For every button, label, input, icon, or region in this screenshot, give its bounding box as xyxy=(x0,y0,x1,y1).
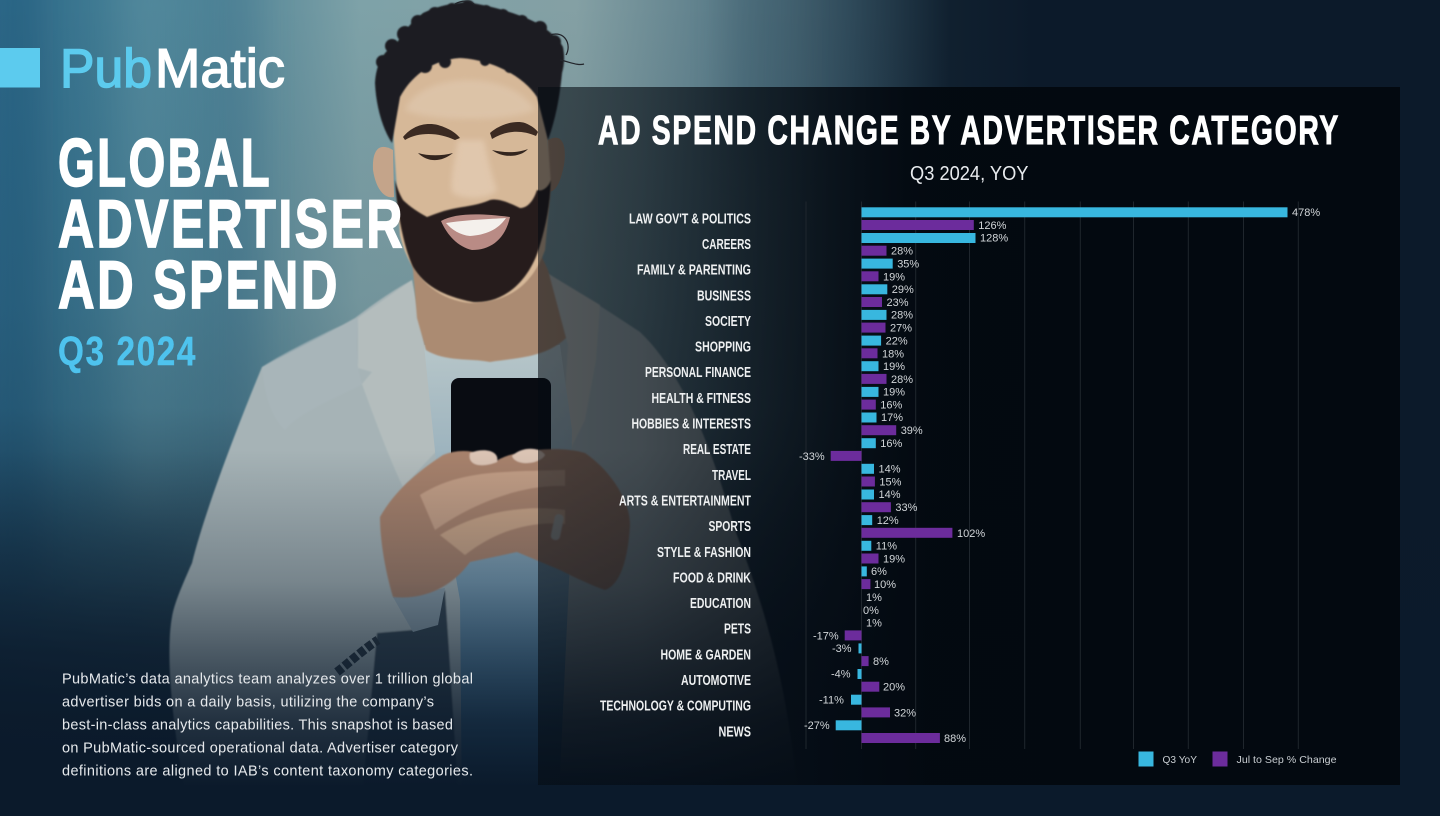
row: Personal Finance: PERSONAL FINANCE xyxy=(645,365,751,381)
cuff buttons xyxy=(337,640,378,672)
row: Law Gov't & Politics: 478% xyxy=(1292,207,1320,219)
jacket xyxy=(169,273,800,816)
row: News xyxy=(718,720,966,745)
row: Law Gov't & Politics: 126% xyxy=(978,220,1007,232)
row: Home & Garden: -3% xyxy=(832,643,852,655)
row: Society: 27% xyxy=(890,323,912,335)
row: Society: SOCIETY xyxy=(705,314,751,330)
hands xyxy=(380,449,630,598)
ears xyxy=(373,147,394,197)
row: Real Estate: 16% xyxy=(880,438,903,450)
teeth xyxy=(446,218,506,236)
row: Shopping xyxy=(695,335,908,360)
legend: Q3 YoY xyxy=(1162,754,1197,766)
panel: chart background xyxy=(538,87,1400,785)
row: Real Estate: -33% xyxy=(799,451,825,463)
row: Home & Garden: 8% xyxy=(873,656,889,668)
row: Law Gov't & Politics xyxy=(629,207,1320,232)
row: Style & Fashion: 11% xyxy=(876,540,897,552)
title: Global Advertiser Ad Spend Q3 2024: AD SPEND xyxy=(58,247,340,323)
row: Style & Fashion xyxy=(657,540,905,566)
row: Arts & Entertainment xyxy=(619,489,918,514)
row: Society xyxy=(705,310,913,335)
phone xyxy=(451,378,551,550)
title: Global Advertiser Ad Spend Q3 2024: Q3 2024 xyxy=(58,328,197,374)
row: Food & Drink: 6% xyxy=(871,566,887,578)
row: Health & Fitness: 19% xyxy=(883,387,905,399)
description text block: advertiser bids on a daily basis, utilizing the company’s xyxy=(62,694,434,710)
row: Travel xyxy=(712,464,902,488)
row: Personal Finance xyxy=(645,361,913,386)
row: Hobbies & Interests: 17% xyxy=(881,412,903,424)
row: Sports: SPORTS xyxy=(708,519,751,535)
description text block: on PubMatic-sourced operational data. Advertiser category xyxy=(62,740,459,756)
row: Automotive xyxy=(681,669,905,694)
description text block: definitions are aligned to IAB’s content taxonomy categories. xyxy=(62,764,473,780)
row: Hobbies & Interests xyxy=(632,412,923,437)
row: Technology & Computing: -11% xyxy=(819,694,844,706)
photo: smiling man holding a phone xyxy=(169,0,800,816)
row: Personal Finance: 19% xyxy=(883,361,905,373)
row: Business: 29% xyxy=(892,284,914,296)
neck xyxy=(412,253,566,362)
row: Food & Drink xyxy=(673,566,896,591)
beard xyxy=(395,180,551,302)
title: Global Advertiser Ad Spend Q3 2024: ADVERTISER xyxy=(58,186,405,262)
row: Hobbies & Interests: HOBBIES & INTERESTS xyxy=(632,416,751,432)
row: Real Estate: REAL ESTATE xyxy=(683,442,751,458)
forehead and nose highlight xyxy=(405,80,535,119)
eyebrows xyxy=(403,124,460,140)
row: Travel: TRAVEL xyxy=(712,468,751,484)
row: Style & Fashion: STYLE & FASHION xyxy=(657,545,751,561)
row: News: NEWS xyxy=(718,724,751,740)
row: Sports xyxy=(708,515,985,540)
row: Careers: 128% xyxy=(980,233,1008,245)
logo: PubMatic: Pub xyxy=(60,37,152,99)
row: Careers: CAREERS xyxy=(702,237,751,253)
row: Business xyxy=(697,284,914,309)
row: Sports: 102% xyxy=(957,528,985,540)
bottom fade over photo xyxy=(0,450,1440,816)
row: Family & Parenting: 35% xyxy=(897,258,919,270)
row: Business: BUSINESS xyxy=(697,288,751,304)
hair xyxy=(375,0,564,143)
row: Education xyxy=(690,592,882,617)
legend xyxy=(1138,752,1337,766)
row: Business: 23% xyxy=(886,297,909,309)
loose curls xyxy=(455,1,584,65)
face xyxy=(392,56,551,303)
row: Education: 0% xyxy=(863,605,879,617)
row: Real Estate xyxy=(683,438,903,463)
row: Arts & Entertainment: 33% xyxy=(895,502,918,514)
row: Shopping: SHOPPING xyxy=(695,340,751,356)
title: Global Advertiser Ad Spend Q3 2024: GLOBAL xyxy=(58,125,272,201)
row: Food & Drink: 10% xyxy=(874,579,896,591)
row: Style & Fashion: 19% xyxy=(883,554,905,566)
description text block: best-in-class analytics capabilities. This snapshot is based xyxy=(62,718,453,734)
row: Travel: 15% xyxy=(879,476,902,488)
row: Food & Drink: FOOD & DRINK xyxy=(673,570,751,586)
row: Careers: 28% xyxy=(891,246,913,258)
row: Home & Garden: HOME & GARDEN xyxy=(660,647,751,663)
row: Society: 28% xyxy=(891,310,913,322)
row: Health & Fitness: 16% xyxy=(880,400,903,412)
description text block: PubMatic’s data analytics team analyzes over 1 trillion global xyxy=(62,672,473,688)
row: Automotive: -4% xyxy=(831,669,851,681)
row: Technology & Computing: TECHNOLOGY & COMPUTING xyxy=(600,699,751,715)
row: Pets xyxy=(724,617,882,642)
row: Automotive: AUTOMOTIVE xyxy=(681,673,751,689)
row: Sports: 12% xyxy=(877,515,899,527)
row: Family & Parenting: 19% xyxy=(883,271,905,283)
row: Education: EDUCATION xyxy=(690,596,751,612)
mouth xyxy=(441,214,510,250)
row: Home & Garden xyxy=(660,643,889,668)
row: Family & Parenting xyxy=(637,258,919,283)
row: Health & Fitness xyxy=(652,387,905,412)
row: Pets: 1% xyxy=(866,617,882,629)
row: Education: 1% xyxy=(866,592,882,604)
row: Arts & Entertainment: 14% xyxy=(878,489,901,501)
row: Pets: PETS xyxy=(724,622,751,638)
title: Global Advertiser Ad Spend Q3 2024 xyxy=(58,125,405,374)
row: News: 88% xyxy=(944,733,966,745)
row: Shopping: 18% xyxy=(882,348,904,360)
logo: PubMatic xyxy=(0,37,285,99)
row: Pets: -17% xyxy=(813,630,839,642)
eyes xyxy=(418,153,453,160)
row: Technology & Computing xyxy=(600,694,916,719)
row: Personal Finance: 28% xyxy=(891,374,913,386)
cuff xyxy=(393,588,445,632)
row: Hobbies & Interests: 39% xyxy=(901,425,923,437)
row: Travel: 14% xyxy=(878,464,901,476)
row: Careers xyxy=(702,233,1008,258)
row: News: -27% xyxy=(804,720,830,732)
description text block xyxy=(62,672,473,780)
logo: PubMatic: Matic xyxy=(155,37,285,99)
row: Shopping: 22% xyxy=(886,335,908,347)
row: Automotive: 20% xyxy=(883,682,905,694)
shirt xyxy=(424,345,572,816)
row: Law Gov't & Politics: LAW GOV'T & POLITICS xyxy=(629,211,751,227)
row: Technology & Computing: 32% xyxy=(894,707,916,719)
bar chart xyxy=(600,202,1320,749)
row: Health & Fitness: HEALTH & FITNESS xyxy=(652,391,751,407)
chart subheading: Q3 2024, YOY xyxy=(910,162,1029,185)
row: Family & Parenting: FAMILY & PARENTING xyxy=(637,263,751,279)
row: Arts & Entertainment: ARTS & ENTERTAINMENT xyxy=(619,494,751,510)
legend: Jul to Sep % Change xyxy=(1236,754,1337,766)
